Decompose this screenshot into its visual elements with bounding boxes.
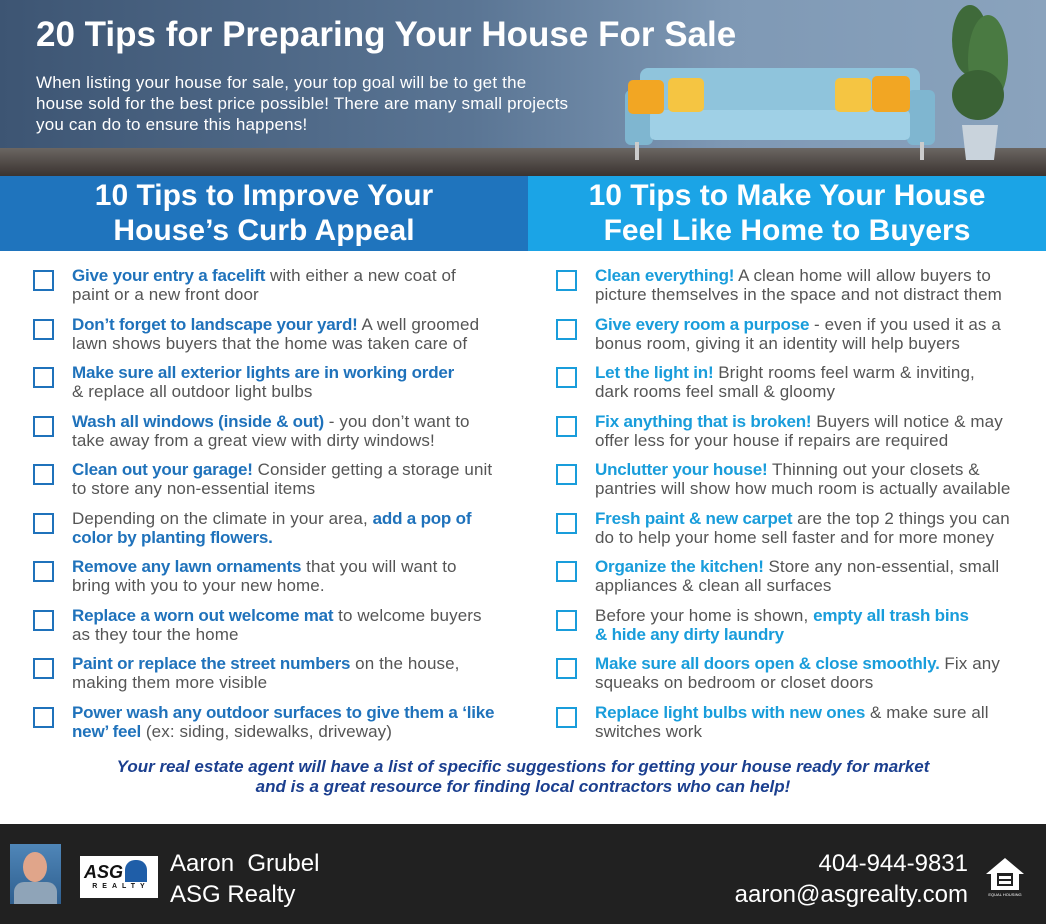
hero banner [0, 0, 1046, 176]
floor [0, 148, 1046, 176]
panel: feel like home list: Replace light bulbs with new ones & make sure all [595, 703, 989, 722]
intro text: When listing your house for sale, your top goal will be to get the house sold for the best price possible! There are many small projects you can do to ensure this happens! [36, 73, 568, 134]
panel: curb appeal list: Paint or replace the street numbers on the house, [72, 654, 459, 673]
contact info [735, 850, 968, 908]
panel: feel like home list: Fresh paint & new carpet are the top 2 things you can [595, 509, 1010, 528]
agent name: ASG Realty [170, 881, 295, 908]
heading: curb appeal: House’s Curb Appeal [113, 214, 415, 247]
panel: feel like home list: Fix anything that is broken! Buyers will notice & may [595, 412, 1003, 431]
heading: feel like home: Feel Like Home to Buyers [604, 214, 970, 247]
panel: feel like home list: Let the light in! Bright rooms feel warm & inviting, [595, 363, 975, 382]
panel: curb appeal list: bring with you to your new home. [72, 576, 325, 595]
panel: curb appeal list: making them more visible [72, 673, 267, 692]
title: 20 Tips for Preparing Your House For Sale [36, 15, 736, 54]
panel: curb appeal list: & replace all outdoor light bulbs [72, 382, 313, 401]
panel: feel like home list: Make sure all doors open & close smoothly. Fix any [595, 654, 1000, 673]
panel: feel like home list [556, 266, 1010, 741]
panel: curb appeal list [33, 266, 494, 741]
panel: curb appeal list: Replace a worn out welcome mat to welcome buyers [72, 606, 482, 625]
panel: curb appeal list: color by planting flowers. [72, 528, 273, 547]
closing note [117, 757, 930, 796]
panel: feel like home list: Before your home is shown, empty all trash bins [595, 606, 969, 625]
agent name: Aaron Grubel [170, 850, 319, 877]
contact info: 404-944-9831 [819, 850, 968, 877]
panel: curb appeal list: take away from a great view with dirty windows! [72, 431, 435, 450]
panel: feel like home list: do to help your home sell faster and for more money [595, 528, 994, 547]
panel: curb appeal list: paint or a new front door [72, 285, 259, 304]
panel: feel like home list: bonus room, giving it an identity will help buyers [595, 334, 960, 353]
icon: equal housing: EQUAL HOUSING [988, 892, 1022, 897]
panel: feel like home list: squeaks on bedroom or closet doors [595, 673, 873, 692]
illustration: plant [952, 5, 1008, 160]
panel: curb appeal list: to store any non-essential items [72, 479, 315, 498]
panel: curb appeal list: as they tour the home [72, 625, 239, 644]
panel: curb appeal list: Remove any lawn ornaments that you will want to [72, 557, 457, 576]
heading: curb appeal [0, 176, 528, 251]
heading: feel like home [528, 176, 1046, 251]
panel: feel like home list: offer less for your house if repairs are required [595, 431, 948, 450]
icon: equal housing [986, 858, 1024, 897]
panel: curb appeal list: lawn shows buyers that the home was taken care of [72, 334, 467, 353]
closing note: and is a great resource for finding local contractors who can help! [256, 777, 790, 796]
contact info: aaron@asgrealty.com [735, 881, 968, 908]
panel: feel like home list: appliances & clean all surfaces [595, 576, 832, 595]
panel: feel like home list: Unclutter your house! Thinning out your closets & [595, 460, 980, 479]
logo: ASG Realty [80, 856, 158, 898]
panel: curb appeal list: Power wash any outdoor surfaces to give them a ‘like [72, 703, 494, 722]
panel: feel like home list: Give every room a purpose - even if you used it as a [595, 315, 1001, 334]
panel: feel like home list: switches work [595, 722, 702, 741]
panel: curb appeal list: Don’t forget to landscape your yard! A well groomed [72, 315, 479, 334]
panel: curb appeal list: Wash all windows (inside & out) - you don’t want to [72, 412, 470, 431]
panel: curb appeal list: Make sure all exterior lights are in working order [72, 363, 454, 382]
panel: feel like home list: dark rooms feel small & gloomy [595, 382, 835, 401]
logo: ASG Realty: REALTY [92, 883, 150, 890]
panel: curb appeal list: Depending on the climate in your area, add a pop of [72, 509, 471, 528]
footer [0, 824, 1046, 924]
panel: feel like home list: Organize the kitchen! Store any non-essential, small [595, 557, 999, 576]
panel: curb appeal list: Give your entry a facelift with either a new coat of [72, 266, 456, 285]
heading: feel like home: 10 Tips to Make Your House [589, 179, 985, 212]
panel: feel like home list: picture themselves in the space and not distract them [595, 285, 1002, 304]
illustration: sofa [625, 68, 935, 160]
closing note: Your real estate agent will have a list of specific suggestions for getting your house ready for market [117, 757, 929, 776]
panel: feel like home list: pantries will show how much room is actually available [595, 479, 1010, 498]
panel: curb appeal list: Clean out your garage! Consider getting a storage unit [72, 460, 492, 479]
agent name [170, 850, 319, 908]
heading: curb appeal: 10 Tips to Improve Your [95, 179, 433, 212]
panel: feel like home list: & hide any dirty laundry [595, 625, 784, 644]
logo: ASG Realty: ASG [84, 862, 123, 882]
panel: curb appeal list: new’ feel (ex: siding, sidewalks, driveway) [72, 722, 392, 741]
panel: feel like home list: Clean everything! A clean home will allow buyers to [595, 266, 991, 285]
agent photo [10, 844, 61, 904]
